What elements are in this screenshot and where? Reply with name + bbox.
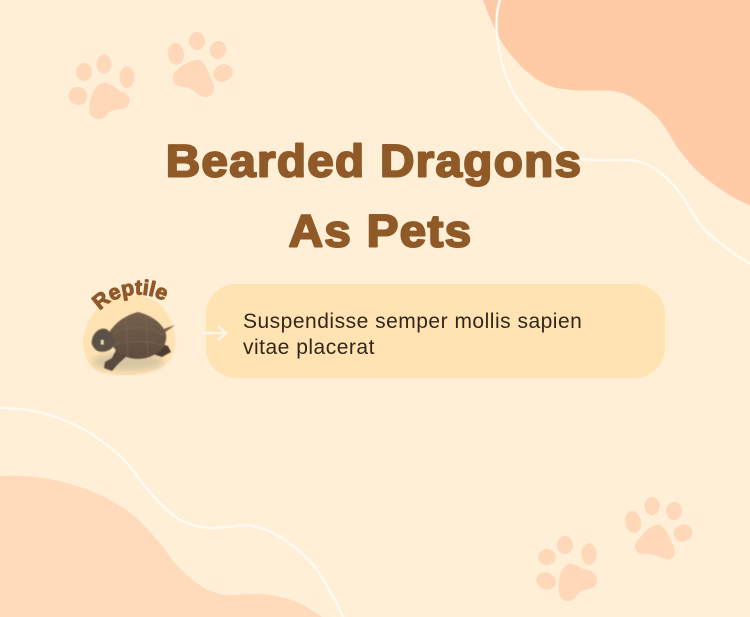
icon: arrow bbox=[201, 326, 226, 340]
curve: bottom left line bbox=[0, 408, 343, 617]
title bbox=[166, 136, 582, 256]
reptile badge bbox=[83, 279, 176, 376]
panel text: vitae placerat bbox=[243, 336, 375, 359]
paw: top left B bbox=[167, 32, 236, 97]
panel text: Suspendisse semper mollis sapien bbox=[243, 310, 582, 333]
badge backdrop bbox=[83, 295, 175, 375]
paw: bottom right D bbox=[534, 536, 597, 601]
title: As Pets bbox=[289, 206, 472, 256]
paw: top left A bbox=[65, 54, 134, 119]
icon: turtle bbox=[92, 312, 175, 371]
panel text bbox=[243, 310, 582, 359]
blob: bottom left bbox=[0, 476, 322, 617]
title: Bearded Dragons bbox=[166, 136, 582, 186]
badge ground shadow bbox=[92, 353, 164, 371]
badge label: Reptile: Reptile bbox=[91, 279, 167, 310]
curve: top right line bbox=[496, 0, 750, 264]
text panel bbox=[206, 284, 665, 378]
blob: top right bbox=[483, 0, 750, 205]
paw: bottom right C bbox=[623, 497, 695, 559]
